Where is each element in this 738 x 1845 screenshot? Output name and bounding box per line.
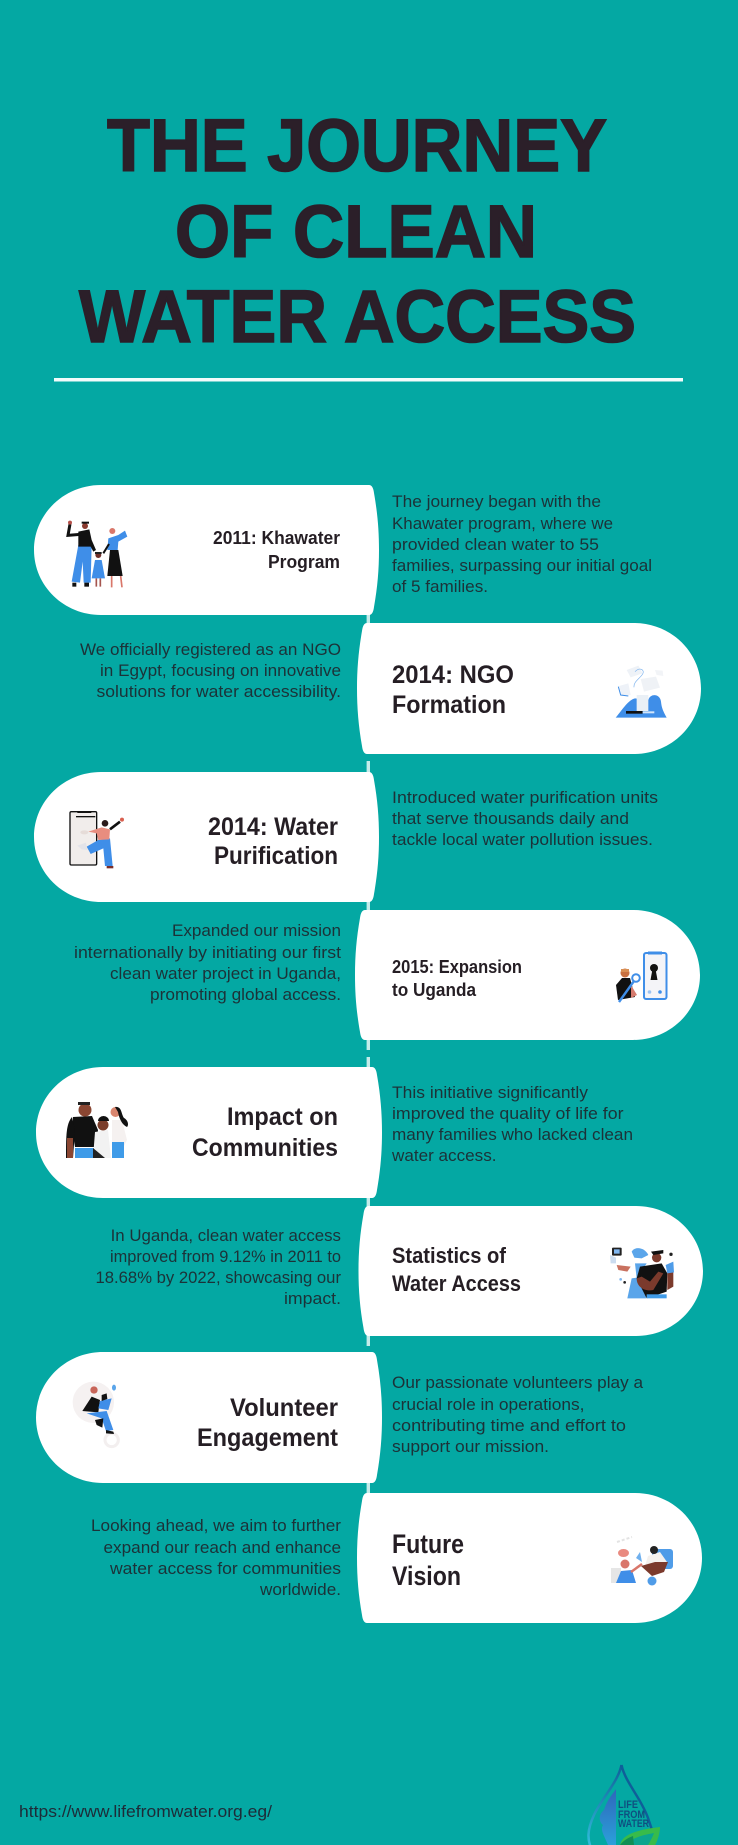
description: in Egypt, focusing on innovative <box>100 662 341 680</box>
logo: Life From Water: FROM <box>618 1809 645 1821</box>
description <box>392 789 658 849</box>
description: This initiative significantly <box>392 1084 589 1102</box>
description <box>74 922 341 1004</box>
heading: Volunteer <box>230 1394 338 1422</box>
heading: Engagement <box>197 1424 339 1452</box>
pill <box>355 910 700 1040</box>
logo: Life From Water: WATER <box>618 1818 649 1830</box>
pill <box>34 485 379 615</box>
step 7: Volunteer Engagement <box>36 1352 644 1483</box>
heading <box>392 661 514 719</box>
step 1: Khawater Program <box>34 485 652 615</box>
description: We officially registered as an NGO <box>80 641 341 659</box>
heading: Future <box>392 1529 464 1559</box>
description: The journey began with the <box>392 493 601 511</box>
description <box>392 493 652 596</box>
description: clean water project in Uganda, <box>110 965 341 983</box>
heading: 2014: Water <box>208 813 338 841</box>
description: water access for communities <box>109 1560 341 1578</box>
pill <box>358 1206 703 1336</box>
description: of 5 families. <box>392 578 488 596</box>
title: WATER ACCESS <box>79 275 636 358</box>
heading <box>192 1103 338 1162</box>
description: Khawater program, where we <box>392 515 613 533</box>
description: solutions for water accessibility. <box>96 683 341 701</box>
icon: community group <box>66 1102 128 1158</box>
description: that serve thousands daily and <box>392 810 629 828</box>
heading: Vision <box>392 1561 461 1591</box>
heading <box>208 813 338 870</box>
description <box>96 1227 342 1308</box>
description: improved the quality of life for <box>392 1105 624 1123</box>
title: OF CLEAN <box>175 190 537 273</box>
timeline connector <box>367 612 370 1494</box>
heading: Statistics of <box>392 1243 507 1268</box>
pill <box>34 772 379 902</box>
description <box>391 1084 633 1165</box>
step 6: Statistics of Water Access <box>96 1206 703 1336</box>
icon: people with phones <box>610 1248 674 1298</box>
title underline <box>54 378 683 382</box>
heading: 2015: Expansion <box>392 957 522 977</box>
heading: 2014: NGO <box>392 661 514 689</box>
step 3: Water Purification <box>34 772 658 902</box>
heading <box>392 1243 521 1296</box>
logo: Life From Water <box>588 1765 660 1845</box>
heading <box>213 528 340 572</box>
description: expand our reach and enhance <box>104 1539 341 1557</box>
heading <box>392 957 522 1000</box>
description: families, surpassing our initial goal <box>392 557 652 575</box>
heading: Water Access <box>392 1271 521 1296</box>
description: contributing time and effort to <box>392 1417 626 1435</box>
description: impact. <box>284 1290 341 1308</box>
description: Expanded our mission <box>172 922 341 940</box>
step 5: Impact on Communities <box>36 1067 633 1198</box>
icon: people sharing water <box>611 1537 673 1586</box>
title: THE JOURNEY <box>107 104 607 187</box>
description: water access. <box>391 1147 496 1165</box>
description: worldwide. <box>259 1581 341 1599</box>
icon: documents <box>616 666 667 718</box>
step 4: Expansion to Uganda <box>74 910 700 1040</box>
description: provided clean water to 55 <box>392 536 599 554</box>
pill <box>36 1352 382 1483</box>
icon: person and phone <box>70 811 124 868</box>
heading: Program <box>268 552 340 572</box>
heading: Formation <box>392 691 506 719</box>
icon: family <box>68 521 127 587</box>
description: crucial role in operations, <box>392 1396 584 1414</box>
website url: https://www.lifefromwater.org.eg/ <box>19 1802 272 1821</box>
description: promoting global access. <box>150 986 341 1004</box>
logo: Life From Water: LIFE <box>618 1799 638 1811</box>
heading: Purification <box>214 842 338 870</box>
heading: 2011: Khawater <box>213 528 340 548</box>
pill <box>36 1067 382 1198</box>
description: internationally by initiating our first <box>74 944 341 962</box>
description <box>91 1517 342 1599</box>
description <box>392 1374 644 1456</box>
heading <box>392 1529 464 1591</box>
pill <box>357 1493 702 1623</box>
step 2: NGO Formation <box>80 623 701 754</box>
step 8: Future Vision <box>91 1493 702 1623</box>
title <box>79 104 636 358</box>
description: Looking ahead, we aim to further <box>91 1517 342 1535</box>
description: Introduced water purification units <box>392 789 658 807</box>
heading: to Uganda <box>392 980 477 1000</box>
description: improved from 9.12% in 2011 to <box>110 1248 341 1266</box>
description <box>80 641 341 701</box>
heading <box>197 1394 339 1452</box>
icon: volunteer with laptop <box>73 1382 118 1447</box>
icon: key and phone <box>616 952 666 1002</box>
description: In Uganda, clean water access <box>111 1227 341 1245</box>
description: tackle local water pollution issues. <box>392 831 653 849</box>
description: 18.68% by 2022, showcasing our <box>96 1269 342 1287</box>
pill <box>357 623 701 754</box>
heading: Communities <box>192 1134 338 1162</box>
description: support our mission. <box>392 1438 549 1456</box>
heading: Impact on <box>227 1103 338 1131</box>
description: Our passionate volunteers play a <box>392 1374 644 1392</box>
description: many families who lacked clean <box>392 1126 633 1144</box>
